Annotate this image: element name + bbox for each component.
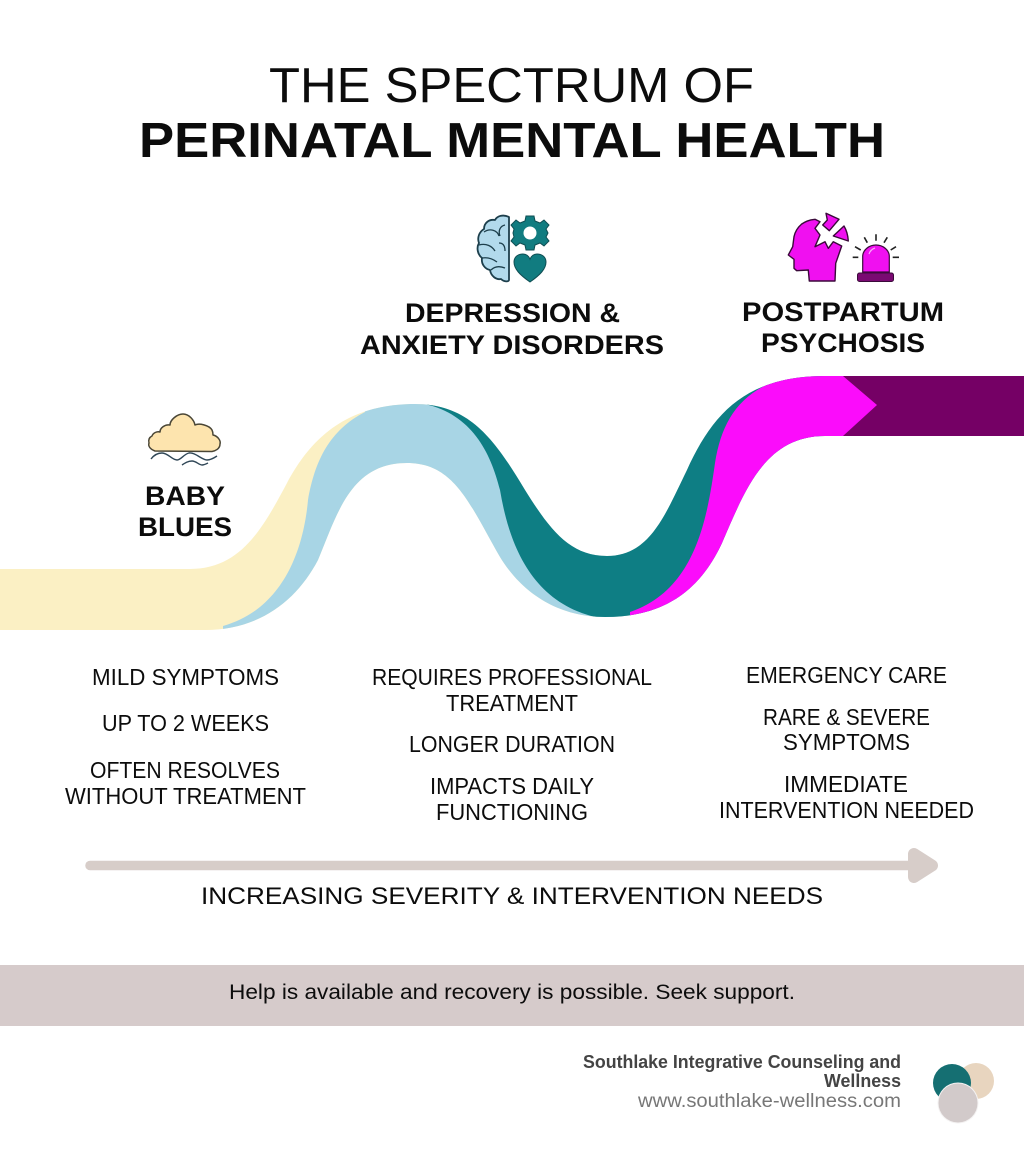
text: postpartum psychosis details: EMERGENCY CARE: [746, 662, 947, 688]
text: depression and anxiety details: LONGER DURATION: [409, 731, 615, 757]
heading: postpartum psychosis: PSYCHOSIS: [761, 328, 925, 358]
text: baby blues details: WITHOUT TREATMENT: [65, 783, 306, 809]
heading: baby blues: BABY: [145, 481, 225, 511]
support banner: Help is available and recovery is possible. Seek support.: [229, 981, 795, 1004]
title: THE SPECTRUM OF: [269, 59, 754, 113]
text: depression and anxiety details: [372, 664, 652, 825]
text: baby blues details: UP TO 2 WEEKS: [102, 710, 269, 736]
text: baby blues details: MILD SYMPTOMS: [92, 664, 279, 690]
footer contact text: [583, 1052, 901, 1112]
icon: fractured head and siren: [788, 213, 899, 282]
text: depression and anxiety details: REQUIRES PROFESSIONAL: [372, 664, 652, 690]
text: postpartum psychosis details: INTERVENTION NEEDED: [719, 797, 974, 823]
heading: postpartum psychosis: POSTPARTUM: [742, 297, 944, 327]
title: [139, 59, 885, 168]
text: postpartum psychosis details: SYMPTOMS: [783, 729, 910, 755]
support banner: [0, 965, 1024, 1026]
severity ribbon: [0, 376, 1024, 630]
heading: depression and anxiety disorders: DEPRESSION &: [405, 298, 620, 328]
arrow: increasing severity: [90, 854, 932, 877]
text: baby blues details: [65, 664, 306, 809]
footer contact text: Southlake Integrative Counseling and: [583, 1052, 901, 1072]
logo: overlapping circles: [933, 1063, 994, 1124]
arrow caption: INCREASING SEVERITY & INTERVENTION NEEDS: [201, 883, 823, 910]
title: PERINATAL MENTAL HEALTH: [139, 114, 885, 168]
text: postpartum psychosis details: [719, 662, 974, 823]
text: baby blues details: OFTEN RESOLVES: [90, 757, 280, 783]
text: depression and anxiety details: FUNCTIONING: [436, 799, 588, 825]
footer contact text: www.southlake-wellness.com: [637, 1091, 901, 1112]
text: depression and anxiety details: IMPACTS DAILY: [430, 773, 594, 799]
icon: cloud with waves: [149, 414, 220, 465]
text: postpartum psychosis details: IMMEDIATE: [784, 771, 908, 797]
heading: depression and anxiety disorders: [360, 298, 664, 360]
footer contact text: Wellness: [824, 1071, 901, 1091]
text: postpartum psychosis details: RARE & SEVERE: [763, 704, 930, 730]
heading: baby blues: [138, 481, 232, 542]
heading: postpartum psychosis: [742, 297, 944, 358]
heading: baby blues: BLUES: [138, 512, 232, 542]
icon: brain, gear and heart: [478, 216, 549, 282]
heading: depression and anxiety disorders: ANXIETY DISORDERS: [360, 330, 664, 360]
text: depression and anxiety details: TREATMENT: [446, 690, 578, 716]
